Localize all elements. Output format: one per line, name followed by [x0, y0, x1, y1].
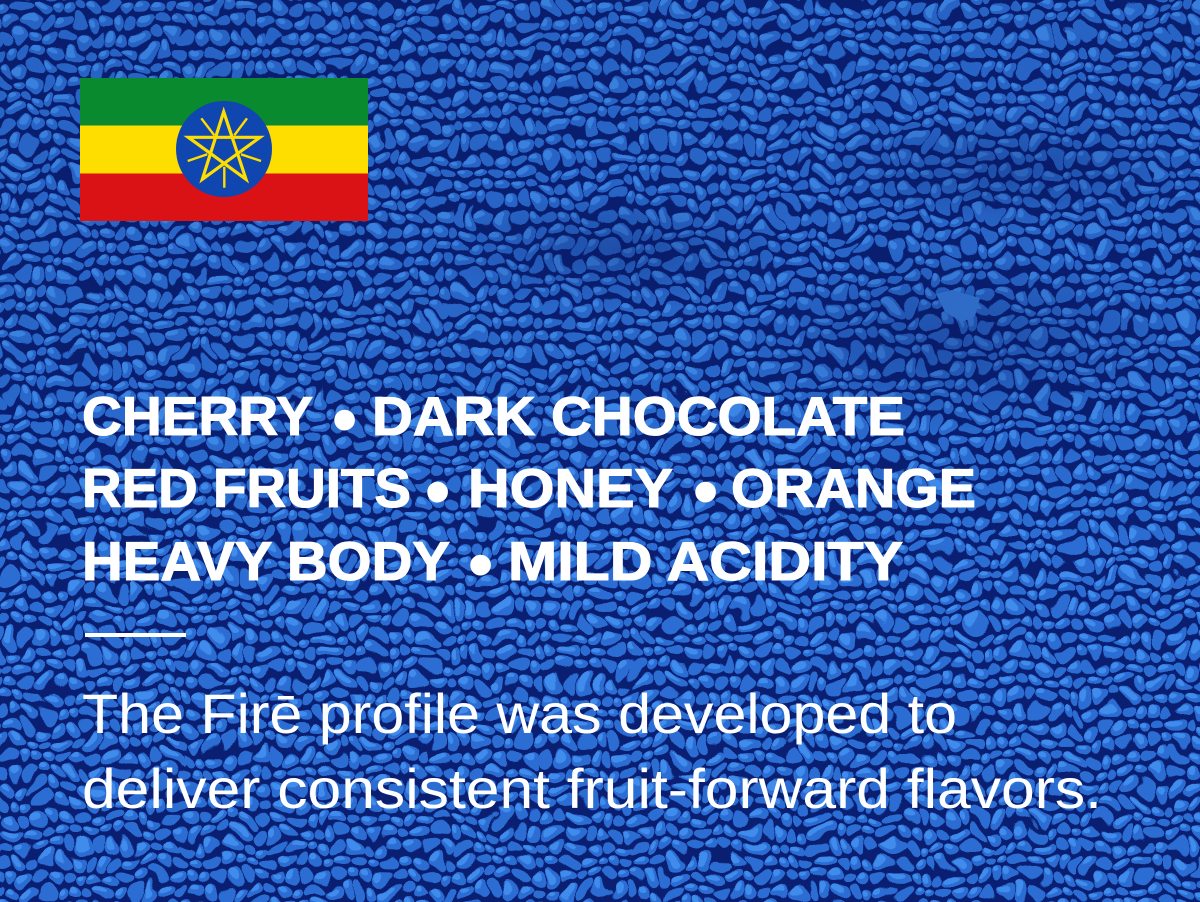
heading: tasting notes: CHERRY [82, 385, 313, 447]
heading: tasting notes: HEAVY BODY [82, 530, 450, 592]
heading: tasting notes: HONEY [468, 457, 673, 519]
divider line [85, 633, 186, 637]
text block: profile description: The Firē profile was developed to [82, 682, 957, 745]
text block: profile description [82, 682, 1102, 820]
heading: tasting notes [82, 380, 976, 605]
heading: tasting notes: ORANGE [731, 457, 976, 519]
heading: tasting notes: • [425, 452, 450, 532]
heading: tasting notes: MILD ACIDITY [508, 530, 903, 592]
heading: tasting notes: RED FRUITS [82, 457, 411, 519]
icon: Ethiopian flag [80, 78, 368, 221]
heading: tasting notes: • [332, 380, 357, 460]
heading: tasting notes: • [468, 525, 493, 605]
text block: profile description: deliver consistent fruit-forward flavors. [82, 757, 1102, 820]
heading: tasting notes: DARK CHOCOLATE [372, 385, 905, 447]
heading: tasting notes: • [693, 452, 718, 532]
